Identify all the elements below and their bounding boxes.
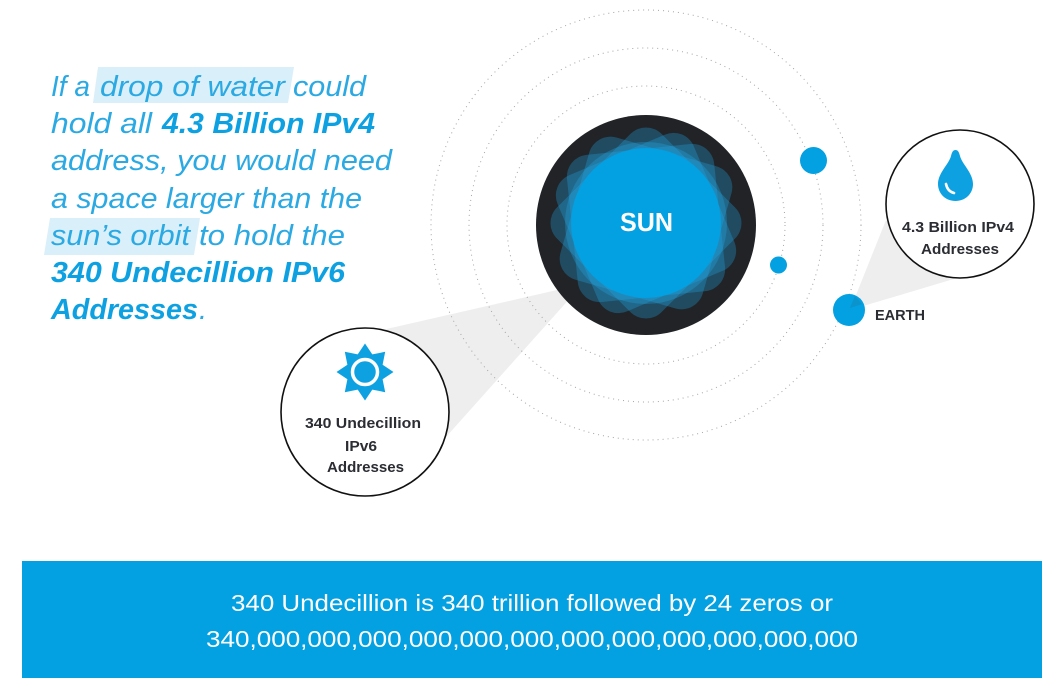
earth label: EARTH [875,307,925,324]
icon: water drop [938,150,973,201]
sun [536,115,756,335]
callout text: 4.3 Billion IPv4 [902,219,1015,236]
headline lines: sun’s orbit [51,220,192,252]
callout circle [886,130,1034,278]
callout text: 340 Undecillion [305,415,421,432]
headline lines: Addresses [50,294,198,326]
callout text: IPv6 [345,438,377,455]
headline lines: to hold the [199,220,345,252]
sun dark disc [536,115,756,335]
banner text: 340,000,000,000,000,000,000,000,000,000,000,000,000 [206,626,858,652]
callout text [902,219,1015,258]
sun corona [541,118,751,328]
headline lines: If a [51,71,90,103]
headline lines [50,71,393,326]
headline lines: drop of water [100,71,286,103]
callout cone: sun [382,290,572,437]
headline lines: 4.3 Billion IPv4 [161,108,375,140]
headline text block [44,67,393,326]
headline lines: a space larger than the [51,183,362,215]
highlight: sun's orbit [44,218,200,255]
callout circle [281,328,449,496]
icon: sun [336,344,394,400]
highlight: drop of water [93,67,294,103]
earth cone overlap [850,296,862,308]
callout text [305,415,421,476]
sun label: SUN [620,207,673,237]
banner background [22,561,1042,678]
callout text: Addresses [327,459,404,476]
planet: earth [833,294,865,326]
orbit rings [431,10,861,440]
callout text: Addresses [921,241,999,258]
callout: IPv4 [886,130,1034,278]
callout: IPv6 [281,328,449,496]
banner [22,561,1042,678]
planet: lower [770,256,787,274]
sun core [571,148,721,298]
headline lines: hold all [51,108,154,140]
banner text: 340 Undecillion is 340 trillion followed by 24 zeros or [231,590,833,616]
headline lines: 340 Undecillion IPv6 [51,257,346,289]
planet: upper [800,147,827,174]
headline lines: address, you would need [51,145,393,177]
headline lines: could [293,71,367,103]
headline lines: . [199,294,207,326]
callout cone: earth [850,220,957,310]
banner text [206,590,858,652]
